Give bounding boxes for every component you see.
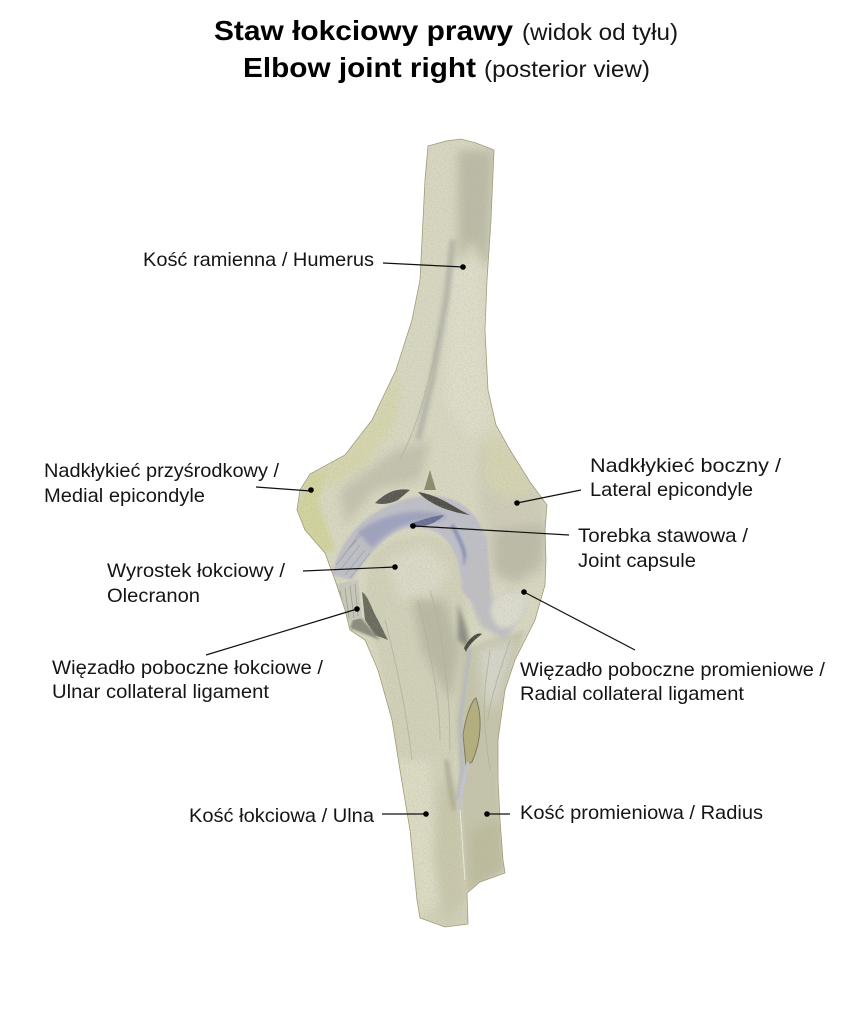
label: ulnar collateral ligament: Więzadło poboczne łokciowe / <box>52 657 324 679</box>
label: humerus: Kość ramienna / Humerus <box>143 249 374 271</box>
label: medial epicondyle <box>44 460 314 507</box>
grain texture <box>290 135 555 935</box>
bone outline <box>297 139 547 927</box>
label: ulnar collateral ligament <box>52 606 360 703</box>
label: radius: Kość promieniowa / Radius <box>520 802 763 824</box>
label: humerus <box>143 249 466 271</box>
lower humerus shading <box>340 442 428 520</box>
olecranon / ulna <box>365 535 470 930</box>
label: radial collateral ligament: Więzadło poboczne promieniowe / <box>520 659 826 681</box>
label: medial epicondyle: Nadkłykieć przyśrodkowy / <box>44 460 280 482</box>
interosseous gap <box>446 650 480 880</box>
label: olecranon: Wyrostek łokciowy / <box>107 560 286 582</box>
title: English: Elbow joint right <box>243 52 476 83</box>
label: joint capsule <box>410 523 749 572</box>
radius <box>456 630 525 893</box>
label: olecranon: Olecranon <box>107 585 200 607</box>
subtitle: Polish: (widok od tyłu) <box>522 19 678 45</box>
label: joint capsule: Torebka stawowa / <box>578 525 749 547</box>
label: ulna: Kość łokciowa / Ulna <box>189 805 374 827</box>
joint capsule <box>332 496 525 640</box>
label: lateral epicondyle: Nadkłykieć boczny / <box>590 455 782 477</box>
illustration: elbow bones <box>290 135 555 935</box>
label: lateral epicondyle <box>514 455 782 506</box>
title <box>214 15 678 83</box>
label: olecranon <box>107 560 398 607</box>
label: lateral epicondyle: Lateral epicondyle <box>590 479 753 501</box>
humerus shading <box>305 150 494 490</box>
ulnar collateral ligament <box>336 580 362 622</box>
lateral condyle shading <box>478 430 546 585</box>
bone base shape <box>297 139 547 927</box>
label: radial collateral ligament: Radial collateral ligament <box>520 683 745 705</box>
title: Polish: Staw łokciowy prawy <box>214 15 513 46</box>
dark shadows at fossa <box>350 470 482 652</box>
label: joint capsule: Joint capsule <box>578 550 696 572</box>
label: radial collateral ligament <box>520 589 826 705</box>
label: ulnar collateral ligament: Ulnar collateral ligament <box>52 681 270 703</box>
surface fibre lines <box>385 330 510 770</box>
medial epicondyle shading <box>296 472 335 552</box>
subtitle: English: (posterior view) <box>484 56 650 82</box>
label: medial epicondyle: Medial epicondyle <box>44 485 205 507</box>
